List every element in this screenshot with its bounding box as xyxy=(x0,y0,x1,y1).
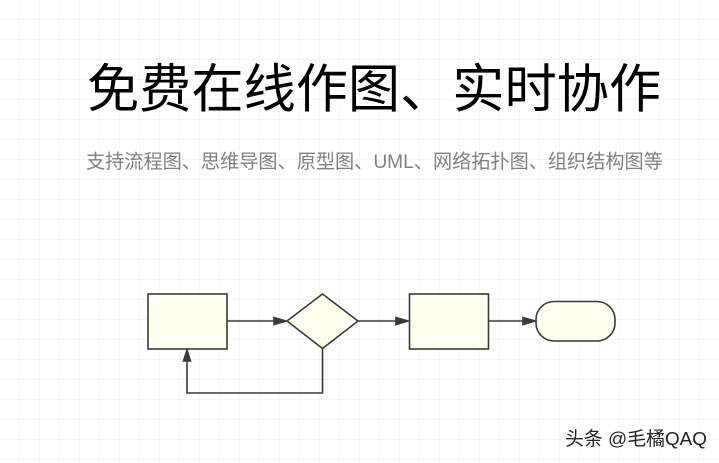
title: 免费在线作图、实时协作 xyxy=(87,61,661,119)
process box 1 xyxy=(148,294,227,349)
arrow: box 1 to diamond xyxy=(227,318,286,324)
decision diamond xyxy=(287,294,358,348)
terminator xyxy=(536,302,615,341)
subtitle: 支持流程图、思维导图、原型图、UML、网络拓扑图、组织结构图等 xyxy=(86,152,663,173)
watermark: 头条 @毛橘QAQ xyxy=(565,429,707,450)
arrow: box 2 to terminator xyxy=(489,318,535,324)
flowchart xyxy=(148,294,615,393)
arrow: diamond back to box 1 xyxy=(184,348,322,393)
process box 2 xyxy=(410,294,488,349)
arrow: diamond to box 2 xyxy=(358,318,408,324)
